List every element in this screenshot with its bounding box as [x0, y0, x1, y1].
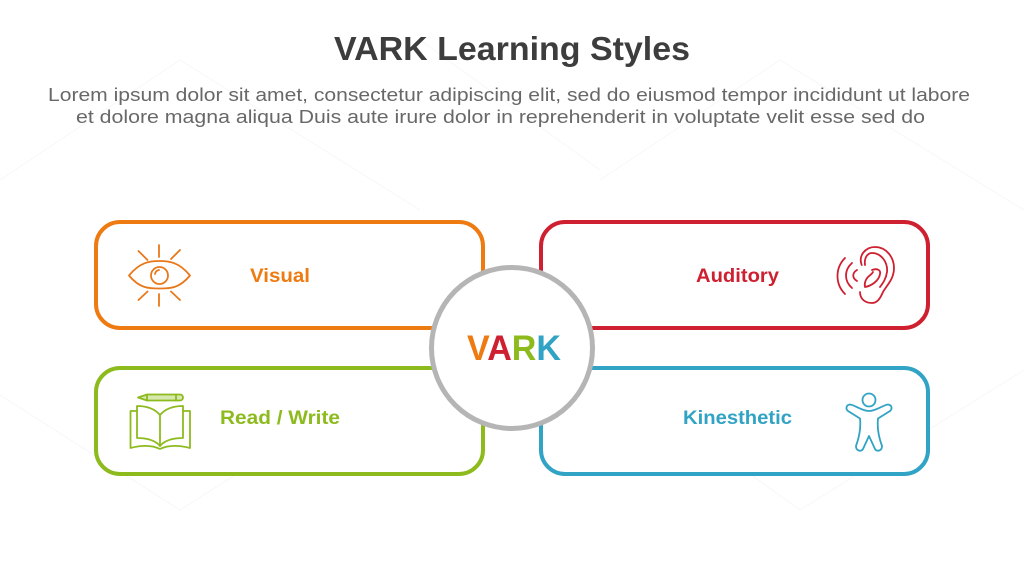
- panel: visual: [96, 222, 483, 328]
- subtitle text block: [48, 84, 970, 127]
- subtitle text block: et dolore magna aliqua Duis aute irure dolor in reprehenderit in voluptate velit esse sed do: [76, 106, 925, 127]
- label: kinesthetic: Kinesthetic: [683, 408, 792, 429]
- panel: kinesthetic: [541, 368, 928, 474]
- title: VARK Learning Styles: [334, 30, 690, 67]
- panel: read / write: [96, 368, 483, 474]
- center circle: [432, 268, 592, 428]
- subtitle text block: Lorem ipsum dolor sit amet, consectetur adipiscing elit, sed do eiusmod tempor incididunt ut labore: [48, 84, 970, 105]
- label: auditory: Auditory: [696, 266, 779, 287]
- icon: eye: [129, 245, 190, 306]
- label: read / write: Read / Write: [220, 408, 340, 429]
- icon: ear: [838, 247, 894, 303]
- label: visual: Visual: [250, 266, 310, 287]
- VARK multicolour label: VARK: [467, 329, 561, 368]
- icon: open book and pencil: [130, 394, 190, 449]
- icon: person: [846, 394, 892, 451]
- panel: auditory: [541, 222, 928, 328]
